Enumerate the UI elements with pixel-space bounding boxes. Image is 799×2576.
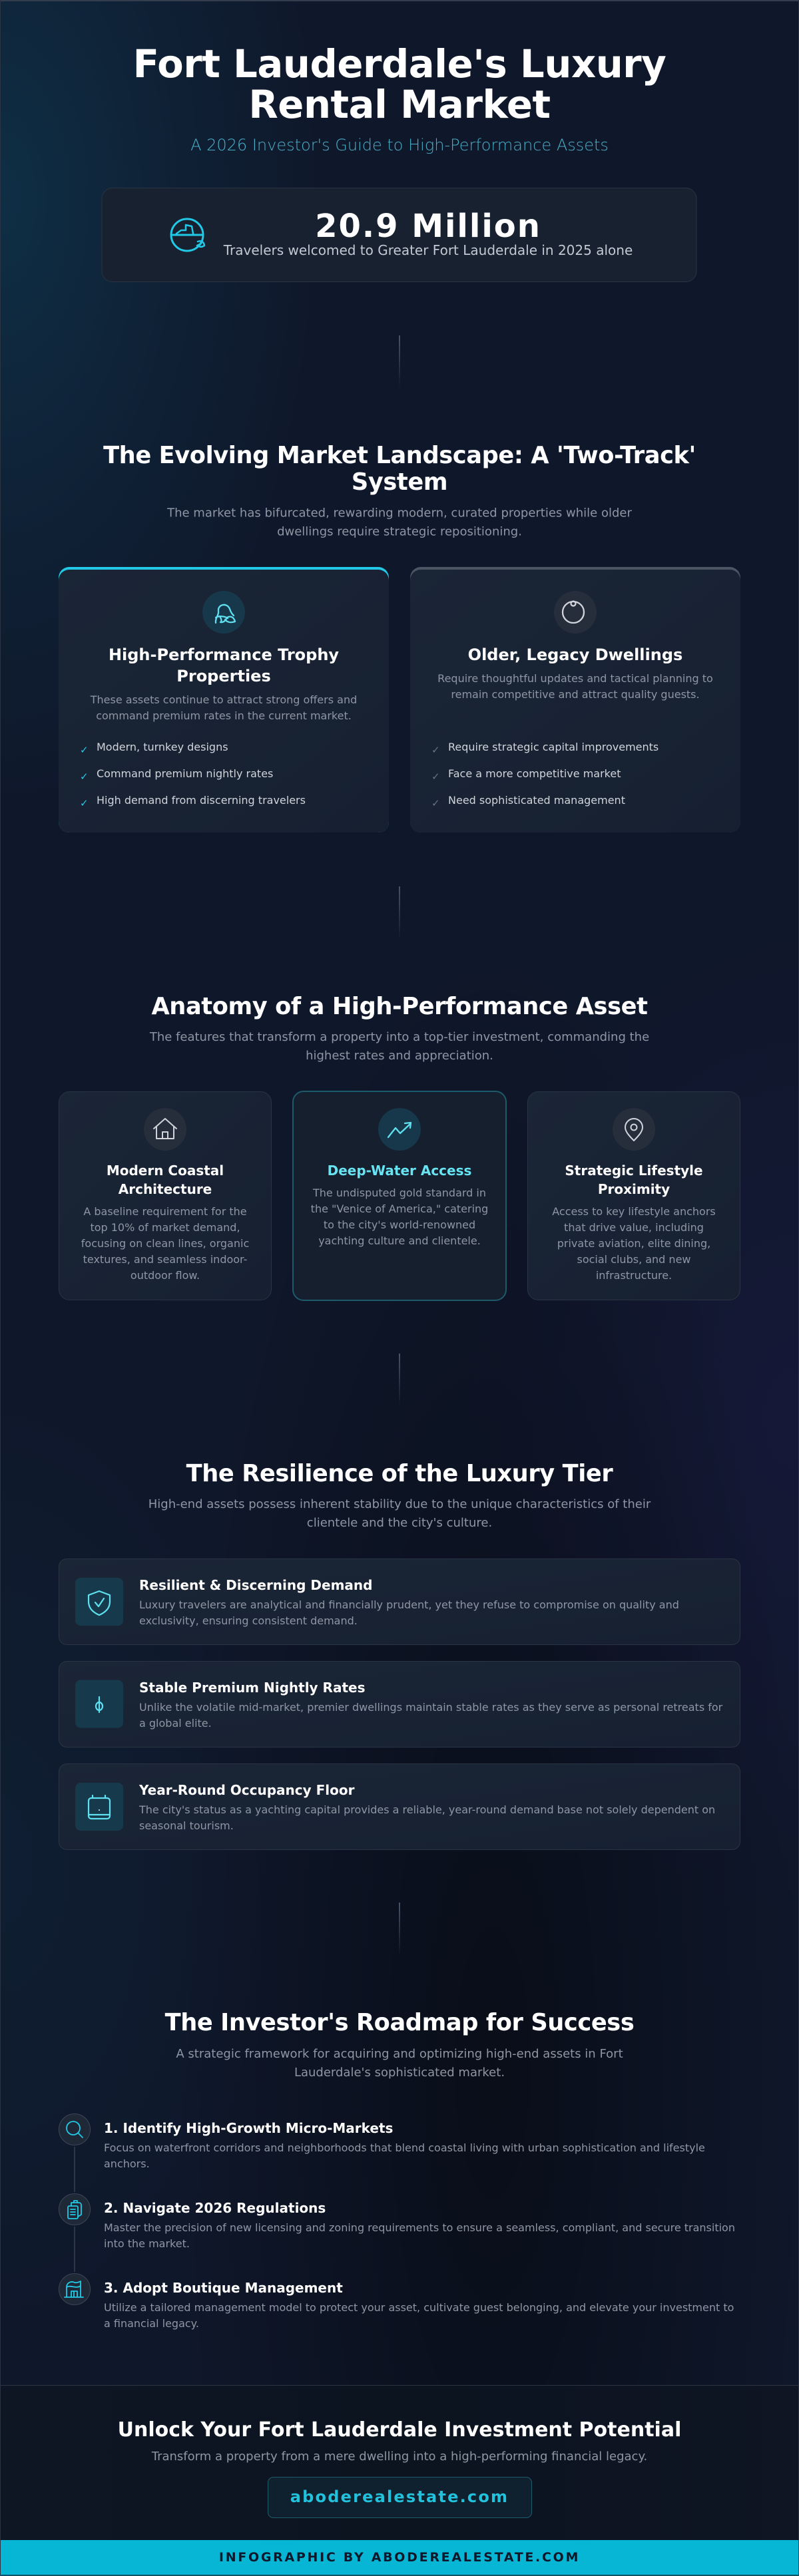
step title: 2. Navigate 2026 Regulations [104,2200,326,2216]
card title: Properties [176,667,271,685]
panel: deep-water access [293,1091,506,1300]
website button [268,2477,531,2518]
icon: trending up [378,1108,421,1151]
row description [138,1803,715,1832]
icon: ring [554,591,597,634]
heading [103,442,696,496]
heading: System [352,468,447,496]
step description [104,2221,735,2250]
step description: anchors. [104,2157,150,2170]
card description: A baseline requirement for the [83,1205,247,1218]
card description [90,693,357,722]
header [102,42,696,282]
checklist [431,741,659,809]
card description: These assets continue to attract strong offers and [90,693,357,706]
step description [104,2141,705,2170]
card description [552,1205,716,1282]
title: Fort Lauderdale's Luxury [133,42,666,87]
row title: Resilient & Discerning Demand [139,1577,372,1593]
checklist: ✓ [80,771,89,783]
row description: The city's status as a yachting capital provides a reliable, year-round demand base not solely dependent on [138,1803,715,1816]
panel: modern coastal architecture [59,1091,272,1300]
checklist: High demand from discerning travelers [97,794,306,807]
footer bar [0,2540,799,2575]
step description: Master the precision of new licensing and zoning requirements to ensure a seamless, compliant, and secure transition [104,2221,735,2234]
icon: map pin [613,1108,655,1151]
panel: stable rates [59,1661,740,1748]
card title: High-Performance Trophy [109,645,339,664]
card title: Older, Legacy Dwellings [468,645,682,664]
step title: 3. Adopt Boutique Management [104,2280,343,2296]
checklist: Require strategic capital improvements [448,741,659,753]
card title: Deep-Water Access [328,1163,471,1179]
stat label: Travelers welcomed to Greater Fort Lauderdale in 2025 alone [223,242,633,258]
row description [139,1701,723,1730]
card title [107,1163,224,1197]
row title: Year-Round Occupancy Floor [138,1782,355,1798]
card description: that drive value, including [564,1221,704,1234]
card description: infrastructure. [596,1269,672,1282]
icon: boutique building [59,2273,91,2305]
row description: seasonal tourism. [139,1819,234,1832]
checklist: Face a more competitive market [448,767,621,780]
checklist: ✓ [431,771,440,783]
step description [104,2301,734,2330]
card title: Proximity [598,1181,670,1197]
card title: Architecture [119,1181,212,1197]
stat panel: 20.9 million travelers [102,188,696,282]
card description: focusing on clean lines, organic [81,1237,249,1250]
card description: Require thoughtful updates and tactical planning to [437,672,713,685]
card description: command premium rates in the current market. [96,709,352,722]
intro text: dwellings require strategic repositioning. [277,524,522,539]
section: resilience [59,1460,740,1850]
title: Rental Market [248,83,551,127]
card description: top 10% of market demand, [90,1221,240,1234]
heading: The Investor's Roadmap for Success [165,2009,634,2036]
card description: textures, and seamless indoor- [83,1253,247,1266]
step description: Utilize a tailored management model to protect your asset, cultivate guest belonging, and elevate your investment to [104,2301,734,2314]
step 3 [59,2273,734,2330]
icon: shield check [75,1578,123,1626]
card title [565,1163,703,1197]
row description [139,1598,679,1627]
card description [437,672,713,701]
stat number: 20.9 Million [315,208,541,245]
row title: Stable Premium Nightly Rates [139,1680,365,1696]
checklist: ✓ [431,744,440,756]
checklist: ✓ [431,797,440,809]
panel: resilient demand [59,1559,740,1645]
icon: search [59,2114,91,2145]
checklist: Command premium nightly rates [97,767,273,780]
checklist: Need sophisticated management [448,794,625,807]
card description: social clubs, and new [577,1253,691,1266]
checklist: ✓ [80,797,89,809]
section: anatomy of an asset [59,993,740,1300]
card description: The undisputed gold standard in [312,1187,486,1199]
intro text: The features that transform a property into a top-tier investment, commanding the [149,1030,649,1044]
heading: Anatomy of a High-Performance Asset [151,993,648,1020]
card description: to the city's world-renowned [324,1218,475,1231]
divider [399,886,400,940]
intro text [166,506,632,539]
intro text: clientele and the city's culture. [307,1516,492,1530]
timeline connector [74,2147,75,2272]
card description: the "Venice of America," catering [311,1202,488,1215]
panel: trophy properties [59,567,389,832]
section: market landscape [59,442,740,832]
panel: strategic lifestyle proximity [527,1091,740,1300]
intro text: The market has bifurcated, rewarding modern, curated properties while older [166,506,632,520]
card description: private aviation, elite dining, [557,1237,710,1250]
checklist: ✓ [80,744,89,756]
icon: boat in circle [171,219,204,251]
card description: remain competitive and attract quality guests. [451,688,700,701]
row description: Unlike the volatile mid-market, premier dwellings maintain stable rates as they serve as personal retreats for [139,1701,723,1714]
step 2 [59,2193,735,2250]
card title: Strategic Lifestyle [565,1163,703,1179]
panel: occupancy floor [59,1763,740,1850]
icon: house [144,1108,186,1151]
row description: a global elite. [139,1717,212,1730]
card description: Access to key lifestyle anchors [552,1205,716,1218]
step title: 1. Identify High-Growth Micro-Markets [104,2120,393,2136]
cta text: Transform a property from a mere dwelling into a high-performing financial legacy. [151,2450,647,2464]
intro text [148,1497,651,1530]
checklist [80,741,306,809]
step 1 [59,2114,705,2170]
intro text: Lauderdale's sophisticated market. [294,2066,505,2080]
intro text: highest rates and appreciation. [306,1049,493,1063]
panel: legacy dwellings [410,567,740,832]
footer bar: INFOGRAPHIC BY ABODEREALESTATE.COM [219,2550,580,2565]
heading: The Evolving Market Landscape: A 'Two-Track' [103,442,696,469]
icon: clipboard [59,2193,91,2225]
section: roadmap [59,2009,735,2330]
divider [399,1354,400,1407]
intro text: High-end assets possess inherent stability due to the unique characteristics of their [148,1497,651,1511]
card description [311,1187,488,1247]
card title [109,645,339,685]
intro text [176,2047,623,2080]
divider [399,1903,400,1956]
intro text: A strategic framework for acquiring and optimizing high-end assets in Fort [176,2047,623,2061]
card description: outdoor flow. [131,1269,200,1282]
website button: aboderealestate.com [290,2487,509,2506]
row description: exclusivity, ensuring consistent demand. [139,1614,358,1627]
call to action panel [0,2385,799,2540]
intro text [149,1030,649,1063]
card description: yachting culture and clientele. [318,1234,481,1247]
icon: rate marker [75,1680,123,1728]
heading: The Resilience of the Luxury Tier [186,1460,613,1487]
step description: Focus on waterfront corridors and neighborhoods that blend coastal living with urban sophistication and lifestyle [104,2141,705,2154]
divider [399,335,400,389]
subtitle: A 2026 Investor's Guide to High-Performance Assets [190,136,609,154]
icon: calendar [75,1783,123,1831]
cta heading: Unlock Your Fort Lauderdale Investment Potential [118,2418,681,2442]
icon: trophy [202,591,245,634]
step description: a financial legacy. [104,2317,199,2330]
step description: into the market. [104,2237,190,2250]
title [133,42,666,127]
card description [81,1205,249,1282]
card title: Modern Coastal [107,1163,224,1179]
row description: Luxury travelers are analytical and financially prudent, yet they refuse to compromise on quality and [139,1598,679,1611]
checklist: Modern, turnkey designs [97,741,228,753]
